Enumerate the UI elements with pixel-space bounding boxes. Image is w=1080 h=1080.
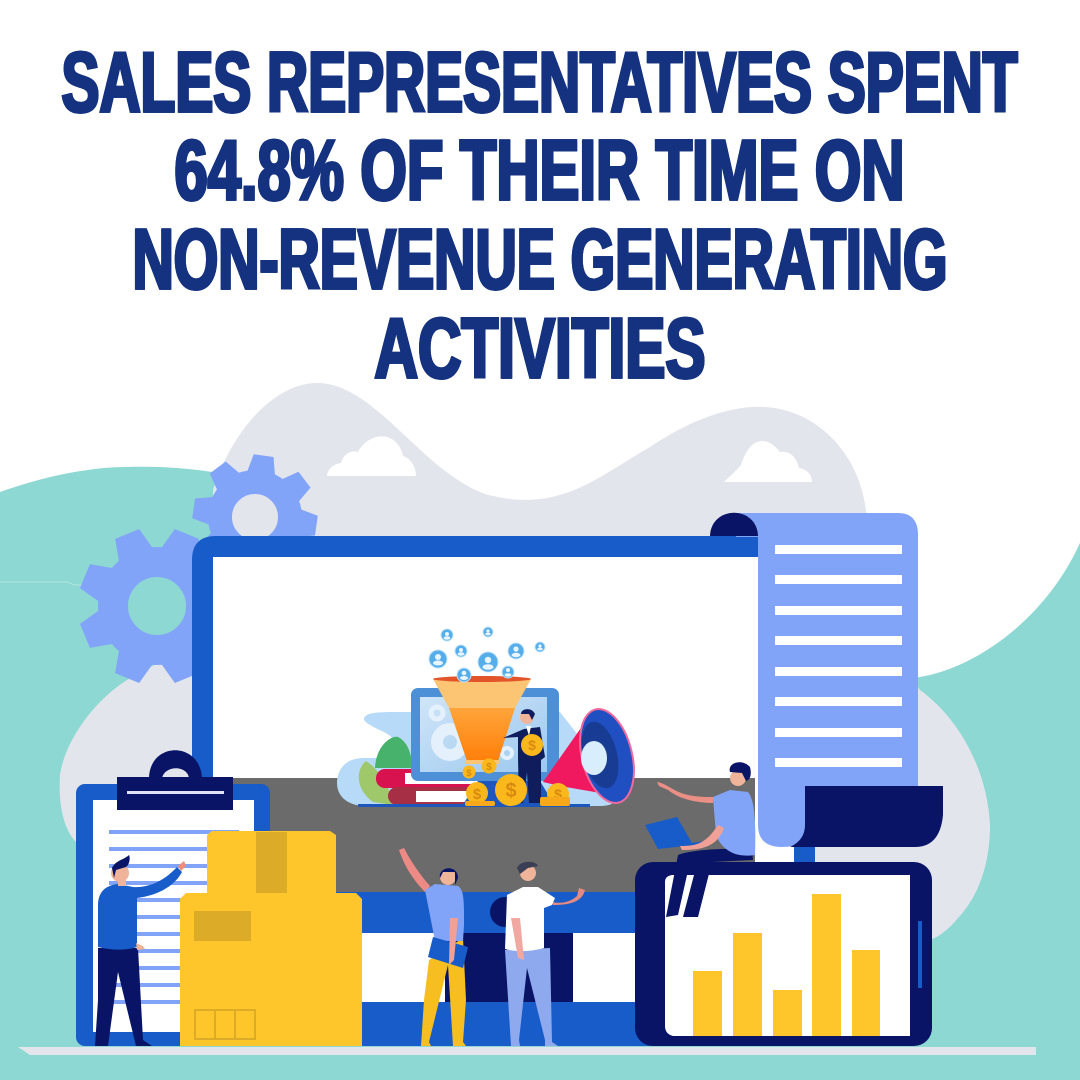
phone with bar chart [635,862,932,1046]
large box [180,893,362,1046]
clipboard [76,750,270,1046]
bars [693,894,880,1036]
ground strip [18,1047,1036,1055]
coins: $ [505,780,517,802]
businessman with coin [503,709,545,803]
person with raised hand on clipboard [95,855,186,1046]
scroll text lines [775,545,902,767]
stacked boxes [180,831,362,1046]
laptop [645,817,712,849]
coins: $ [486,762,492,773]
scroll base [790,786,943,847]
clipboard clip [117,777,233,810]
phone side button [918,921,922,988]
grey backdrop upper blob [213,383,867,700]
cloud right [724,441,812,482]
funnel illustration [337,627,643,809]
connector stem [794,847,815,863]
title [62,36,1018,396]
woman folder [428,937,468,968]
user bubbles [429,627,545,682]
seated person with laptop [645,762,755,917]
small monitor gears [437,729,463,755]
box barcode [195,1010,255,1039]
scroll curl [710,513,758,536]
small monitor [411,688,559,806]
cloud left [327,436,416,476]
teal background shape [0,467,1080,1080]
title: ACTIVITIES [375,302,706,396]
small gear [192,454,318,580]
monitor screen [213,557,760,779]
white line on teal [0,582,84,585]
scene baseline [358,804,590,807]
coins [462,758,570,806]
megaphone [543,703,643,809]
scroll document [710,513,943,847]
grey backdrop lower blob [60,640,990,1000]
coin in hand: $ [528,737,536,753]
white gap beside scroll [755,778,800,868]
desktop monitor [192,536,770,1046]
book stack [376,769,488,805]
illustration cloud backdrop [337,712,620,806]
box label [194,911,251,941]
monitor lower strip [360,892,650,1046]
small monitor stand [462,781,555,806]
coins: $ [473,786,482,803]
coins: $ [466,768,472,778]
clipboard paper [93,800,254,1032]
phone screen [665,875,910,1036]
small box tape [256,832,287,893]
coins: $ [554,786,562,802]
monitor camera dot [490,897,520,927]
funnel scene plant [375,737,412,768]
coin in hand [521,734,543,756]
small box [207,831,336,893]
monitor dark band [230,778,760,892]
man in white shirt [505,862,585,1046]
funnel [433,676,531,764]
woman with yellow trousers [399,848,468,1046]
clipboard lines [109,830,239,1004]
monitor white and navy panel [360,933,636,1002]
large gear [78,527,236,685]
